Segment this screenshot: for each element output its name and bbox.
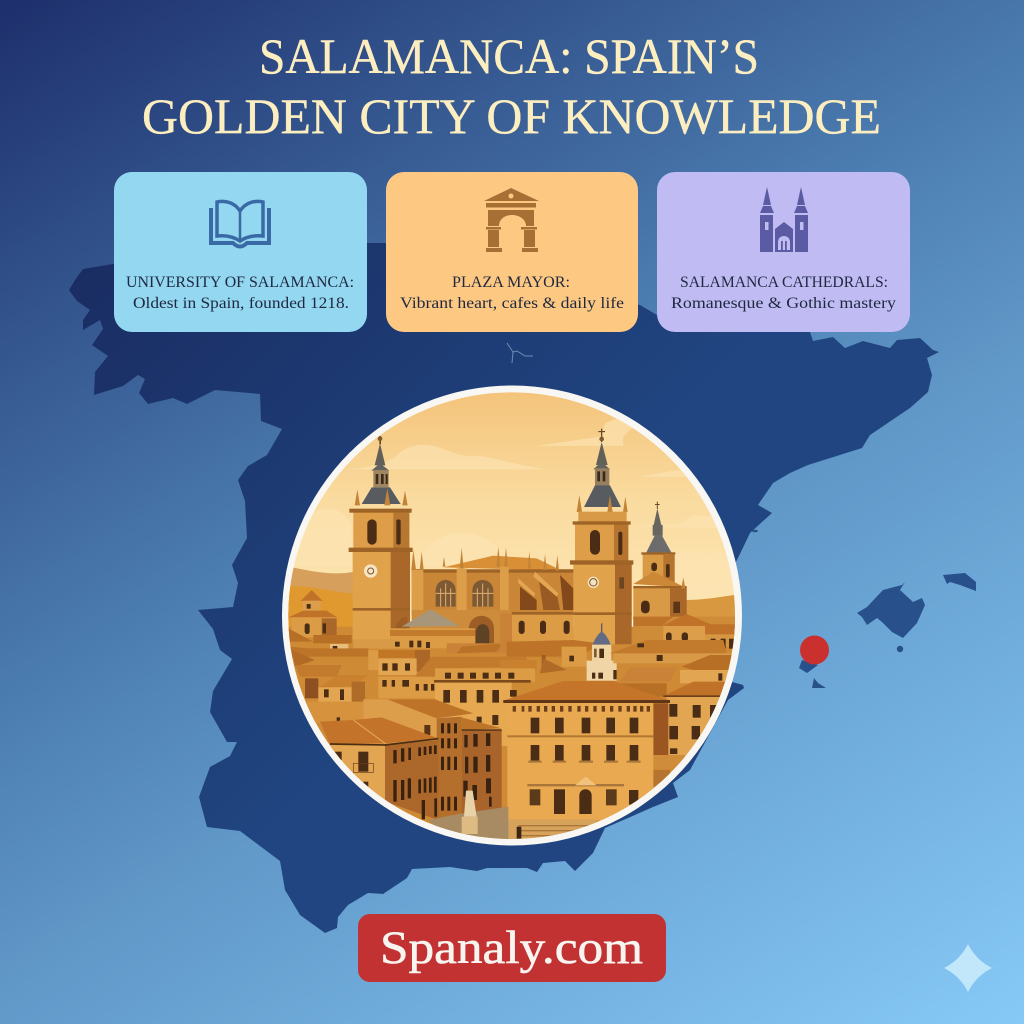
icon: cathedral [760, 187, 808, 252]
sky [280, 380, 750, 620]
card text: Vibrant heart, cafes & daily life [400, 295, 624, 312]
panel: University of Salamanca [114, 172, 367, 332]
panel: Salamanca Cathedrals [657, 172, 910, 332]
cathedral lower walls [390, 609, 737, 649]
island: Formentera [812, 678, 826, 688]
town base [280, 627, 750, 847]
map of Spain [69, 240, 976, 933]
card text [671, 274, 896, 312]
island: Cabrera [897, 646, 903, 652]
title: GOLDEN CITY OF KNOWLEDGE [142, 88, 881, 144]
brand button [358, 914, 666, 982]
title: SALAMANCA: SPAIN’S [259, 28, 759, 84]
card text: SALAMANCA CATHEDRALS: [680, 274, 888, 291]
island: Menorca [943, 573, 976, 591]
middle town rows [290, 613, 600, 723]
river mark on map [507, 343, 533, 363]
location pin [800, 636, 829, 664]
card text: UNIVERSITY OF SALAMANCA: [126, 274, 354, 291]
right town rows [610, 640, 737, 787]
card text: PLAZA MAYOR: [452, 274, 570, 291]
icon: sparkle [944, 944, 992, 992]
panel: Plaza Mayor [386, 172, 638, 332]
long mid building [434, 668, 535, 746]
left hillside house [288, 590, 352, 652]
icon: open book [211, 201, 269, 246]
cupola [587, 623, 617, 681]
circular illustration: Salamanca skyline [280, 380, 750, 847]
island: Columbretes [752, 530, 758, 532]
island: Mallorca [857, 582, 925, 638]
cathedral nave [411, 547, 575, 617]
hills [288, 568, 353, 620]
lower left buildings [320, 699, 502, 820]
card text [400, 274, 624, 312]
right bell tower [570, 429, 633, 644]
card text: Romanesque & Gothic mastery [671, 295, 896, 312]
card text: Oldest in Spain, founded 1218. [133, 295, 349, 312]
brand button: Spanaly.com [380, 922, 643, 974]
plaza and statue [428, 790, 508, 839]
foreground palace [503, 681, 670, 847]
mainland [69, 240, 939, 933]
island: Ibiza [799, 660, 818, 673]
icon: arch [484, 188, 539, 252]
card text [126, 274, 354, 312]
title [142, 28, 881, 144]
clouds [293, 418, 737, 593]
left bell tower [349, 436, 413, 640]
third small tower [633, 502, 687, 620]
